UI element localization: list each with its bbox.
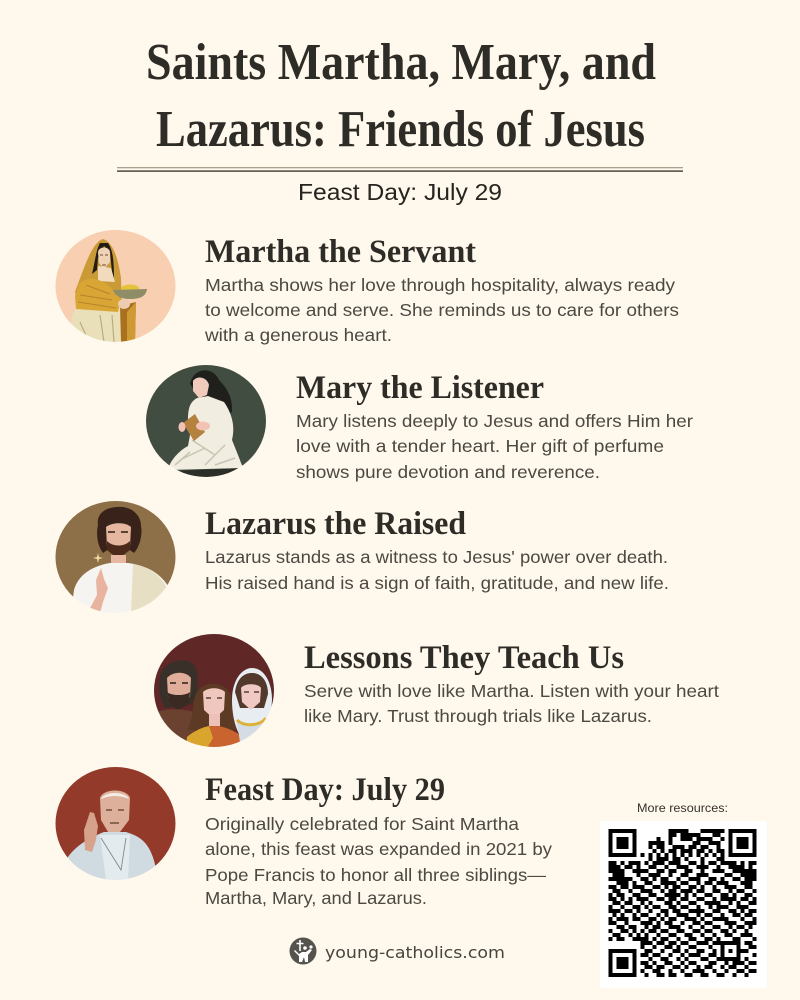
text: feast description: Pope Francis to honor all three siblings— (205, 865, 547, 885)
icon: three siblings portrait (154, 634, 274, 747)
QR code (600, 821, 767, 988)
panel: Feast Day (50, 762, 552, 908)
text: Martha description: with a generous heart. (204, 325, 392, 345)
text: Martha description (204, 275, 679, 345)
text: Martha description: to welcome and serve. She reminds us to care for others (205, 300, 679, 320)
text: Lessons description: like Mary. Trust through trials like Lazarus. (304, 706, 652, 726)
icon: young-catholics logo (290, 938, 316, 964)
text: feast description: alone, this feast was expanded in 2021 by (205, 839, 552, 859)
icon: Lazarus portrait (56, 501, 176, 613)
subtitle: feast day: Feast Day: July 29 (298, 179, 502, 205)
panel: Lessons (150, 630, 719, 752)
heading: Mary the Listener: Mary the Listener (296, 370, 544, 406)
title: Lazarus: Friends of Jesus (156, 101, 645, 158)
text: Lazarus description (205, 547, 669, 593)
heading: Lazarus the Raised: Lazarus the Raised (205, 506, 466, 542)
text: Mary description: Mary listens deeply to Jesus and offers Him her (296, 411, 693, 431)
website url: young-catholics.com (325, 943, 505, 962)
panel: Martha (50, 225, 679, 347)
text: Mary description: shows pure devotion and reverence. (296, 462, 600, 482)
icon: Martha portrait (56, 230, 176, 342)
text: Mary description: love with a tender heart. Her gift of perfume (296, 436, 664, 456)
icon: Mary portrait (146, 365, 266, 477)
icon: Pope Francis portrait (56, 767, 176, 880)
panel: Lazarus (56, 501, 668, 613)
text: feast description: Martha, Mary, and Lazarus. (205, 888, 427, 908)
text: Lazarus description: Lazarus stands as a witness to Jesus' power over death. (205, 547, 668, 567)
panel: Mary (140, 360, 693, 482)
heading: Lessons They Teach Us: Lessons They Teach Us (304, 640, 624, 676)
title (146, 34, 656, 158)
text: Lazarus description: His raised hand is a sign of faith, gratitude, and new life. (205, 573, 669, 593)
text: Mary description (296, 411, 693, 482)
heading: Martha the Servant: Martha the Servant (205, 234, 476, 270)
text: Lessons description: Serve with love like Martha. Listen with your heart (304, 681, 719, 701)
text: feast description: Originally celebrated for Saint Martha (205, 814, 519, 834)
text: Lessons description (304, 681, 719, 726)
label: more resources: More resources: (637, 801, 728, 815)
title: Saints Martha, Mary, and (146, 34, 656, 91)
text: feast description (205, 814, 552, 908)
heading: Feast Day: July 29: Feast Day: July 29 (205, 772, 445, 808)
text: Martha description: Martha shows her love through hospitality, always ready (205, 275, 675, 295)
